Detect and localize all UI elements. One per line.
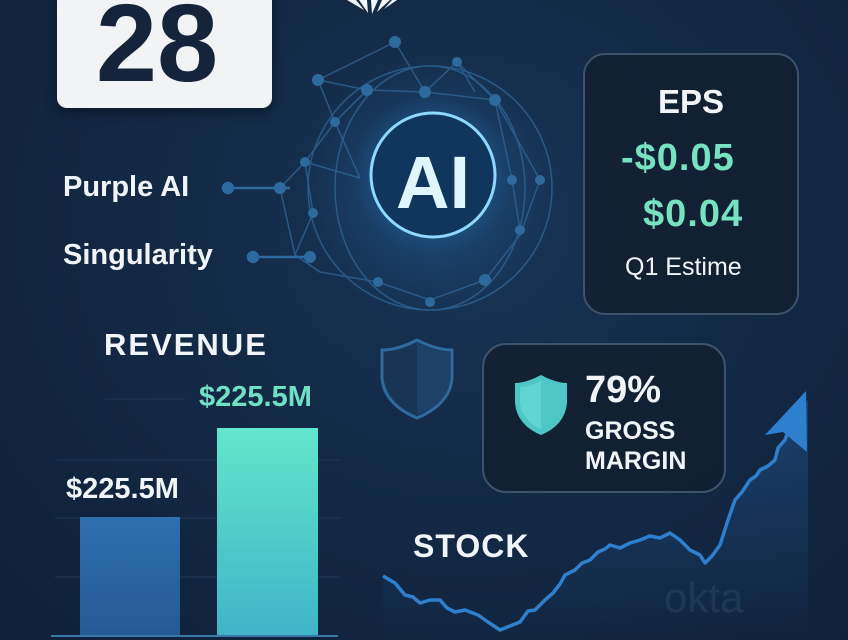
revenue bars: [51, 399, 340, 636]
panel: EPS: $0.04: [643, 193, 743, 235]
watermark okta: okta: [664, 574, 744, 621]
AI circle: [353, 95, 513, 255]
AI circle: AI: [396, 141, 470, 224]
panel: EPS: [583, 53, 799, 315]
value: right bar: $225.5M: [199, 381, 312, 413]
panel: EPS: Q1 Estime: [625, 253, 742, 281]
heading: REVENUE: REVENUE: [104, 327, 268, 362]
date card: [57, 0, 272, 108]
panel: EPS: -$0.05: [621, 137, 735, 179]
panel: gross margin: 79%: [585, 369, 661, 411]
icon: top striped: [347, 0, 397, 14]
panel: EPS: EPS: [658, 83, 724, 120]
stock chart: [383, 391, 808, 640]
heading: STOCK: STOCK: [413, 528, 529, 564]
label: Purple AI: Purple AI: [63, 171, 189, 203]
panel: gross margin: [482, 343, 726, 493]
network sphere: [274, 36, 560, 315]
panel: gross margin: MARGIN: [585, 447, 686, 475]
panel: gross margin: GROSS: [585, 417, 675, 445]
value: left bar: $225.5M: [66, 473, 179, 505]
label: Singularity: Singularity: [63, 239, 213, 271]
icon: outline shield: [382, 340, 452, 418]
connector lines: [223, 183, 310, 262]
